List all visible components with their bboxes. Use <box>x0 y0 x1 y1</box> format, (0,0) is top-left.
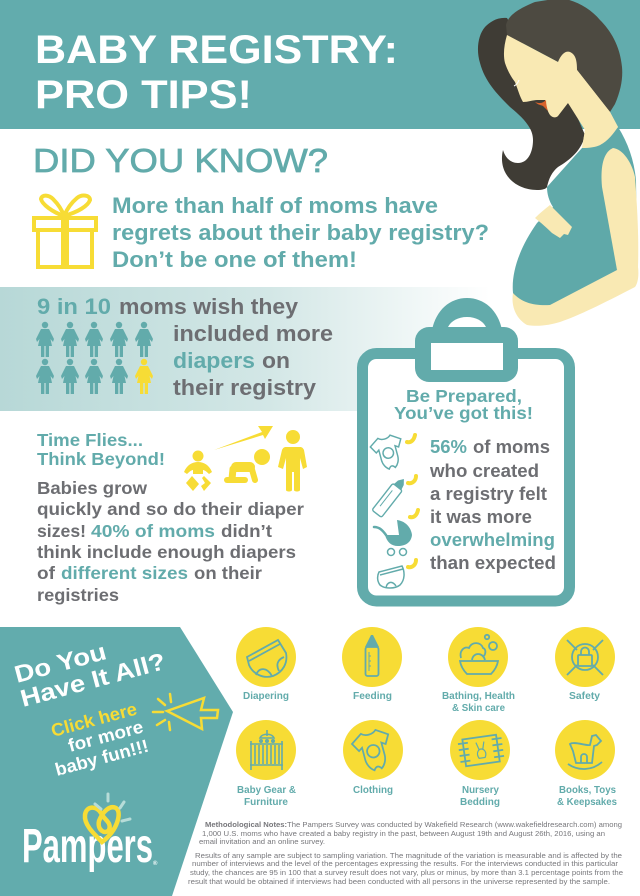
title: BABY REGISTRY: <box>35 28 398 72</box>
category: safety: Safety <box>569 690 600 702</box>
pictogram: 10 moms <box>36 322 153 394</box>
heading: did you know: DID YOU KNOW? <box>33 142 328 179</box>
text: babies grow: different sizes <box>61 563 188 583</box>
category: books, toys and keepsakes: & Keepsakes <box>557 796 617 808</box>
category: bathing <box>442 627 515 714</box>
category: nursery bedding: Bedding <box>460 796 500 808</box>
header band <box>0 0 640 129</box>
category: safety <box>555 627 615 702</box>
text: 56 percent: than expected <box>430 553 556 573</box>
icon: small diaper <box>378 566 404 588</box>
text: 56 percent: of moms <box>473 437 550 457</box>
category: nursery bedding <box>450 720 510 808</box>
icon: bottle <box>372 476 408 517</box>
illustration: pregnant woman <box>478 0 638 326</box>
category: nursery bedding: Nursery <box>462 784 499 796</box>
title <box>35 28 398 117</box>
text: methodological notes: Methodological Notes:The Pampers Survey was conducted by Wakefield Research (www.wakefieldresearch.com) among <box>205 820 622 829</box>
icon: stroller <box>374 520 412 556</box>
category: baby gear and furniture: Baby Gear & <box>237 784 296 796</box>
call to action text: baby fun!!! <box>53 736 151 780</box>
logo: pampers <box>22 794 158 873</box>
logo: pampers: Pampers <box>22 820 153 873</box>
icon: onesie <box>369 433 408 472</box>
text: regrets statement: regrets about their baby registry? <box>112 220 489 245</box>
category: clothing <box>343 720 403 796</box>
panel: 9 in 10 band <box>0 287 490 411</box>
category: bathing: Bathing, Health <box>442 690 515 702</box>
text: methodological notes: result that would be obtained if interviews had been conducted with all persons in the universe represented by the sample. <box>188 877 610 886</box>
text: methodological notes: study, the chances are 95 in 100 that a survey result does not vary, plus or minus, by more than 3.1 percentage points from the <box>190 868 623 877</box>
panel: clipboard <box>362 298 570 601</box>
call to action text: for more <box>66 717 145 756</box>
text: 9 in 10 moms: on <box>262 348 290 373</box>
text: 9 in 10 moms: 9 in 10 <box>37 294 111 319</box>
category: baby gear and furniture: Furniture <box>244 796 288 808</box>
text: 9 in 10 moms: moms wish they <box>119 294 298 319</box>
text: 56 percent: 56% <box>430 437 467 457</box>
category: baby gear and furniture <box>236 720 296 808</box>
checkmarks <box>407 435 418 567</box>
category: diapering <box>236 627 296 702</box>
logo: pampers: ® <box>153 860 158 867</box>
text: regrets statement: More than half of moms have <box>112 193 438 218</box>
text: babies grow: Babies grow <box>37 478 147 498</box>
category: bathing: & Skin care <box>452 702 505 714</box>
text: babies grow: sizes! <box>37 521 86 541</box>
call to action text: Click here <box>49 699 139 741</box>
text: methodological notes: Results of any sample are subject to sampling variation. The magnitude of the variation is measurable and is affected by the <box>195 851 622 860</box>
text: babies grow <box>37 478 304 605</box>
category: books, toys and keepsakes <box>555 720 617 808</box>
text: babies grow: didn’t <box>221 521 272 541</box>
text: 56 percent: a registry felt <box>430 484 547 504</box>
heading: be prepared <box>394 386 533 423</box>
text: babies grow: registries <box>37 585 119 605</box>
text: methodological notes <box>188 820 623 886</box>
heading: be prepared: Be Prepared, <box>406 386 522 406</box>
category: clothing: Clothing <box>353 784 393 796</box>
text: 9 in 10 moms <box>37 294 333 400</box>
text: methodological notes: number of interviews and the level of the percentages expressing the results. For the interviews conducted in this particular <box>192 859 619 868</box>
call to action text: Have It All? <box>18 648 168 713</box>
text: 56 percent <box>429 437 556 573</box>
text: 9 in 10 moms: diapers <box>173 348 255 373</box>
category: feeding: Feeding <box>353 690 392 702</box>
text: babies grow: of <box>37 563 55 583</box>
category: diapering: Diapering <box>243 690 289 702</box>
text: babies grow: on their <box>194 563 262 583</box>
heading: time flies: Time Flies... <box>37 430 143 450</box>
text: methodological notes: 1,000 U.S. moms who have created a baby registry in the past, between August 19th and August 26th, 2016, using an <box>202 829 605 838</box>
category: feeding <box>342 627 402 702</box>
heading: time flies <box>37 430 165 469</box>
text: regrets statement: Don’t be one of them! <box>112 247 357 272</box>
title: PRO TIPS! <box>35 73 252 117</box>
icon: gift <box>34 196 96 268</box>
heading: time flies: Think Beyond! <box>37 449 165 469</box>
text: 56 percent: overwhelming <box>430 530 555 550</box>
icon: cursor arrow <box>153 694 218 730</box>
text: 56 percent: who created <box>429 461 539 481</box>
text: 9 in 10 moms: their registry <box>173 375 316 400</box>
text: babies grow: quickly and so do their diaper <box>37 499 304 519</box>
text: regrets statement <box>112 193 489 272</box>
text: babies grow: think include enough diapers <box>37 542 296 562</box>
text: methodological notes: email invitation and an online survey. <box>199 837 325 846</box>
text: 56 percent: it was more <box>430 507 532 527</box>
text: babies grow: 40% of moms <box>91 521 215 541</box>
panel: do you have it all <box>0 627 233 896</box>
text: 9 in 10 moms: included more <box>173 321 333 346</box>
category: books, toys and keepsakes: Books, Toys <box>559 784 616 796</box>
icon: baby growth stages <box>184 430 307 492</box>
arrow: growth <box>214 426 273 450</box>
heading: be prepared: You’ve got this! <box>394 403 533 423</box>
call to action text <box>12 638 168 780</box>
call to action text: Do You <box>12 638 109 689</box>
